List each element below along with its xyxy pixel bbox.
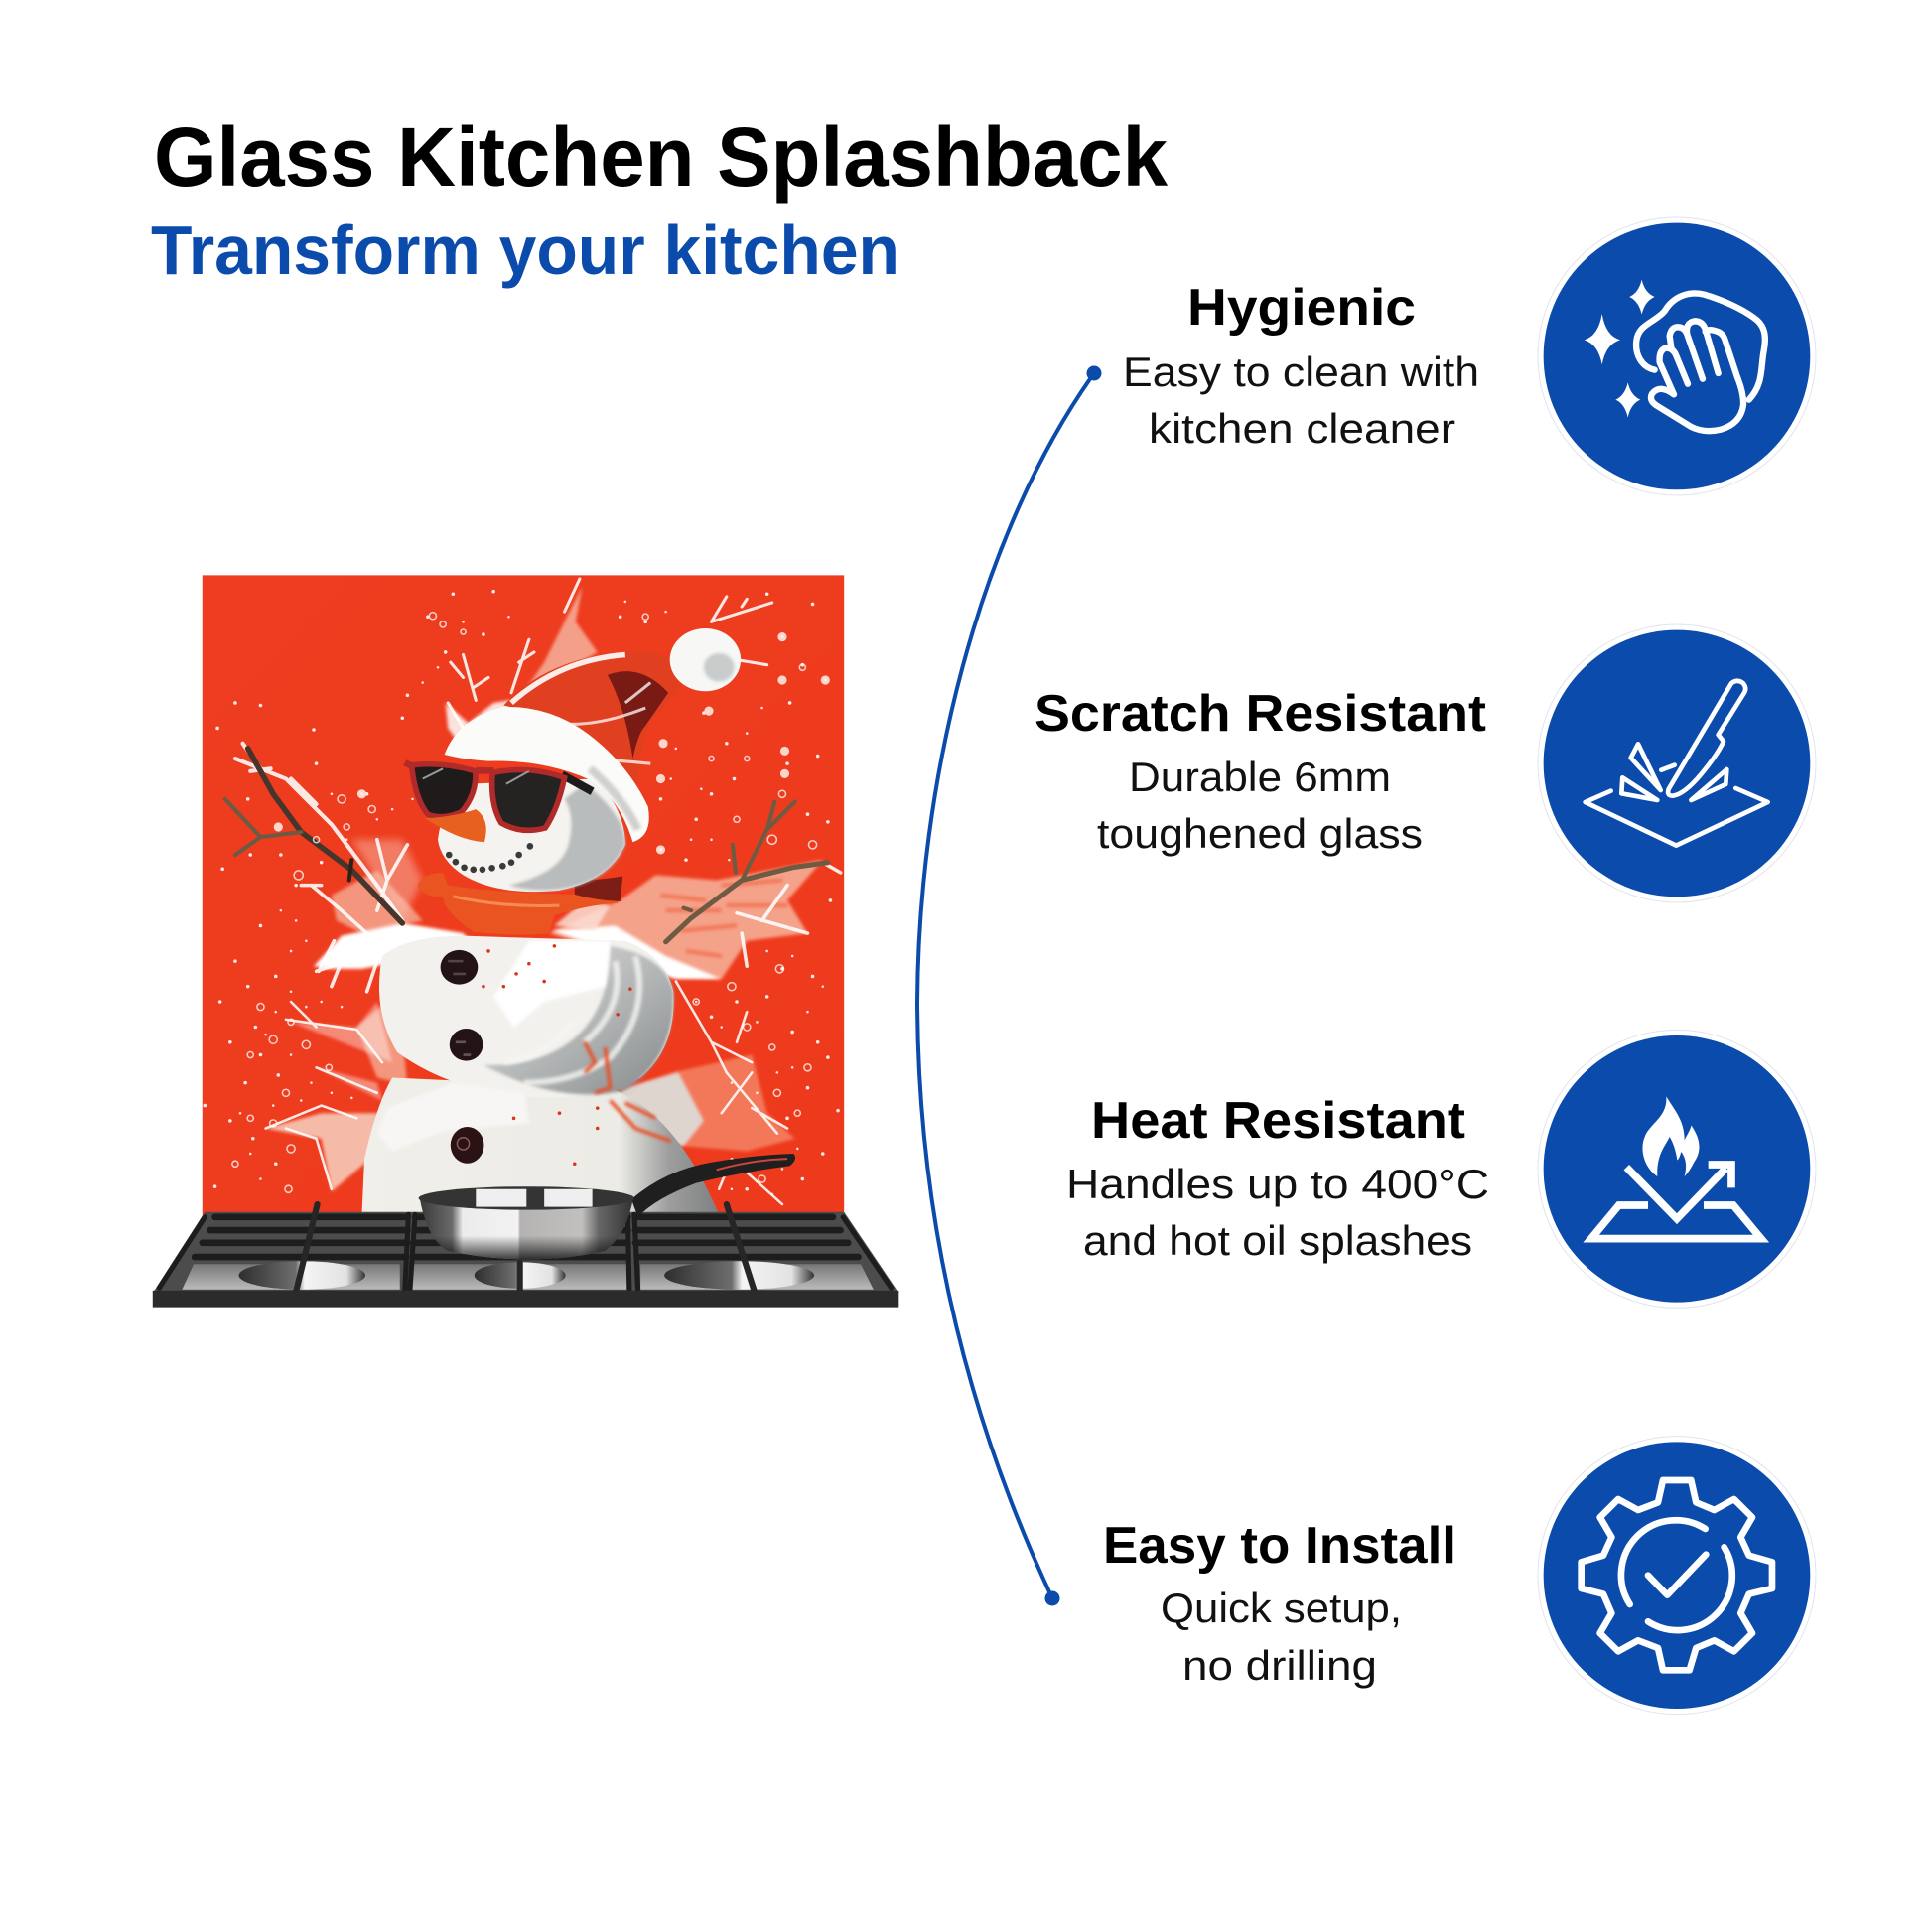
santa hat [503, 651, 691, 784]
cooktop [153, 1204, 898, 1308]
carrot nose [425, 809, 486, 842]
feature: scratch resistant: Durable 6mm [1129, 754, 1391, 800]
feature: scratch resistant: toughened glass [1097, 810, 1423, 857]
panel: product image of splashback above cooktop [153, 575, 898, 1308]
title: Glass Kitchen Splashback [154, 110, 1168, 204]
head shading [508, 784, 625, 890]
subtitle: Transform your kitchen [151, 211, 899, 289]
icon: hand wiping with sparkles [1538, 217, 1816, 495]
curved connector line [917, 365, 1102, 1606]
feature: scratch resistant: Scratch Resistant [1035, 685, 1486, 743]
sunglasses [405, 762, 593, 830]
burner trays [182, 1264, 874, 1290]
splashback background [203, 575, 844, 1218]
feature: hygienic: Easy to clean with [1123, 348, 1479, 395]
icon: knife scratching glass [1538, 624, 1816, 902]
feature: hygienic: Hygienic [1187, 279, 1416, 337]
burners [239, 1261, 814, 1290]
feature: hygienic: kitchen cleaner [1149, 405, 1455, 452]
snowman [225, 628, 828, 1214]
icon: gear with checkmark [1538, 1437, 1816, 1715]
feature: scratch resistant [1035, 685, 1486, 857]
pan rim [419, 1186, 634, 1210]
feature: easy to install: no drilling [1182, 1642, 1377, 1689]
feature: heat resistant: and hot oil splashes [1083, 1217, 1472, 1264]
button top [441, 950, 478, 985]
scarf [418, 873, 622, 935]
middle body [379, 936, 674, 1097]
pan handle [631, 1154, 795, 1217]
feature: hygienic [1123, 279, 1479, 452]
button bottom [451, 1127, 483, 1164]
grates [159, 1214, 892, 1290]
right twig arm [666, 801, 828, 942]
cooktop front lip [153, 1291, 898, 1308]
hat fur trim [445, 707, 649, 842]
left twig arm [225, 749, 402, 923]
feature: heat resistant [1066, 1092, 1489, 1264]
head [438, 778, 625, 892]
hat pompom [670, 628, 741, 691]
icon: flame reflected off surface [1538, 1030, 1816, 1308]
snow at waist [377, 1083, 529, 1151]
body swirl shading [483, 946, 673, 1094]
cross grates [296, 1204, 755, 1292]
feature: easy to install: Quick setup, [1161, 1585, 1402, 1631]
waist orange streaks [585, 1042, 671, 1141]
feature: heat resistant: Heat Resistant [1091, 1092, 1465, 1150]
button middle [450, 1029, 483, 1061]
feature: easy to install: Easy to Install [1103, 1517, 1456, 1575]
cooktop base [153, 1212, 898, 1293]
pan bowl [420, 1200, 632, 1259]
mouth of coal dots [449, 846, 530, 870]
feature: easy to install [1103, 1517, 1456, 1689]
feature: heat resistant: Handles up to 400°C [1066, 1161, 1489, 1207]
water droplets [205, 592, 838, 1194]
water splash behind snowman [235, 579, 841, 1204]
lower body [361, 1078, 719, 1214]
snow chunk on chest [493, 941, 610, 1027]
red paint speckles [483, 946, 630, 1164]
frying pan [419, 1154, 795, 1259]
